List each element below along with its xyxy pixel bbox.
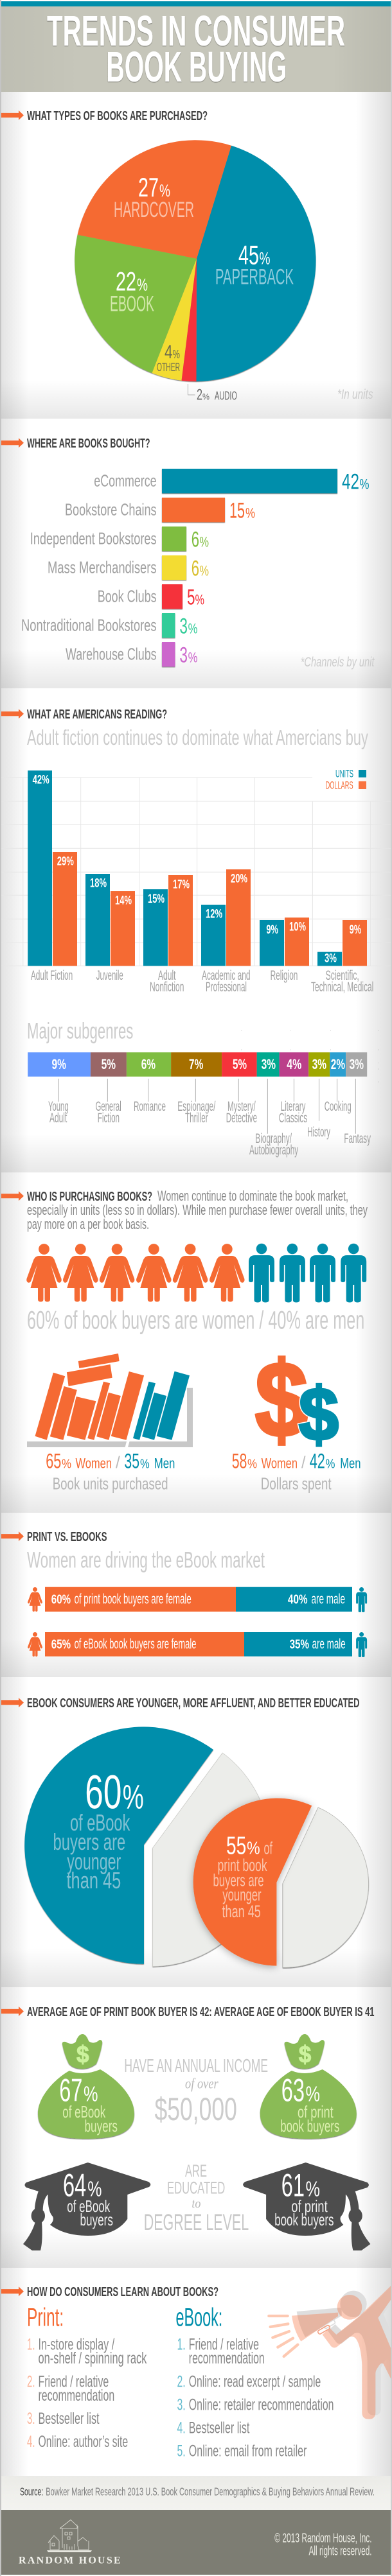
stat: book units purchased: % bbox=[140, 1458, 150, 1472]
education text bbox=[144, 2161, 249, 2235]
stat: book units purchased: Book units purchased bbox=[53, 1474, 168, 1493]
pie: print buyers under 45: print book bbox=[217, 1856, 267, 1875]
list: ebook: eBook: bbox=[176, 2303, 222, 2331]
arrow bbox=[1, 2286, 24, 2296]
subgenre leader lines and labels: Autobiography bbox=[249, 1143, 298, 1158]
pictogram: women and men bbox=[26, 1244, 366, 1302]
subheading: major subgenres: Major subgenres bbox=[27, 1018, 133, 1043]
heading: PRINT VS. EBOOKS bbox=[27, 1530, 107, 1544]
group: academic and professional: 12% bbox=[206, 908, 222, 921]
heading: HOW DO CONSUMERS LEARN ABOUT BOOKS? bbox=[27, 2285, 218, 2299]
bar: nontraditional bookstores: 3 bbox=[179, 614, 188, 639]
source strip bbox=[1, 2476, 391, 2510]
icon: books on shelf bbox=[27, 1353, 193, 1447]
icon: dollar signs: $ bbox=[299, 1372, 339, 1456]
group: adult fiction: 29% bbox=[57, 855, 74, 869]
subgenre leader lines and labels: Adult bbox=[49, 1111, 67, 1126]
arrow bbox=[1, 438, 24, 448]
bar: ecommerce: eCommerce bbox=[94, 471, 157, 491]
bar: warehouse clubs: 3 bbox=[179, 643, 188, 668]
income text: of over bbox=[185, 2076, 219, 2092]
bar: bookstore chains: 15 bbox=[229, 499, 245, 523]
panel: where books are bought bbox=[1, 419, 391, 688]
list: print bbox=[27, 2303, 147, 2451]
header panel bbox=[1, 1, 391, 92]
header background bbox=[1, 6, 391, 92]
arrow bbox=[1, 1531, 24, 1541]
pie: ebook buyers under 45: % bbox=[123, 1779, 144, 1816]
logo: random house bbox=[19, 2519, 121, 2566]
list: ebook: 4. bbox=[177, 2419, 186, 2437]
label: hardcover: % bbox=[159, 181, 170, 200]
split bar: print buyers bbox=[28, 1587, 367, 1612]
pie: ebook buyers under 45: younger bbox=[67, 1849, 121, 1875]
bar: nontraditional bookstores: Nontraditional Bookstores bbox=[21, 616, 157, 635]
label: audio: 2 bbox=[197, 387, 202, 404]
stat: book units purchased bbox=[46, 1450, 175, 1493]
group: juvenile: 18% bbox=[90, 877, 107, 891]
list: ebook bbox=[176, 2303, 334, 2460]
list: print: 1. bbox=[27, 2335, 35, 2353]
group: religion bbox=[260, 918, 309, 983]
chart grid bbox=[1, 778, 391, 966]
income text: $50,000 bbox=[154, 2091, 237, 2127]
list: print: 3. bbox=[27, 2410, 35, 2428]
split bar: print buyers: 40% bbox=[288, 1592, 308, 1606]
subgenre leader lines and labels: Thriller bbox=[185, 1111, 208, 1126]
label: other: 4 bbox=[165, 342, 172, 363]
graduation cap: print buyers: of print bbox=[291, 2197, 328, 2216]
group: adult fiction: Adult Fiction bbox=[31, 968, 73, 983]
icon: dollar signs: $ bbox=[299, 1372, 339, 1456]
arrow bbox=[1, 110, 24, 120]
label: paperback: % bbox=[260, 249, 270, 268]
group: scientific, technical, medical bbox=[311, 920, 373, 995]
group: religion: 9% bbox=[266, 923, 278, 937]
money bag: ebook buyers: of eBook bbox=[62, 2102, 106, 2121]
stat: book units purchased: 65 bbox=[46, 1450, 61, 1473]
subgenre leader lines and labels: Biography/ bbox=[255, 1131, 292, 1146]
money bag: ebook buyers bbox=[38, 2034, 134, 2139]
subgenre leader lines and labels: Mystery/ bbox=[227, 1099, 256, 1114]
money bag: ebook buyers: % bbox=[84, 2082, 98, 2105]
subgenre leader lines and labels: Young bbox=[48, 1099, 69, 1114]
logo: random house: RANDOM HOUSE bbox=[19, 2555, 121, 2566]
stacked bar: subgenres: 2% bbox=[331, 1056, 345, 1072]
label: paperback: 45 bbox=[238, 240, 259, 270]
stacked bar: subgenres: 3% bbox=[350, 1056, 364, 1072]
graduation cap: ebook buyers: buyers bbox=[80, 2210, 113, 2229]
stacked bar: subgenres: 5% bbox=[233, 1056, 247, 1072]
icon: dollar signs: $ bbox=[255, 1341, 308, 1459]
split bar: ebook buyers: 35% bbox=[290, 1638, 309, 1652]
graduation cap: ebook buyers: 64 bbox=[63, 2167, 86, 2203]
subgenre leader lines and labels: Detective bbox=[226, 1111, 257, 1126]
bar: bookstore chains: % bbox=[245, 505, 255, 521]
label: audio: AUDIO bbox=[215, 390, 237, 403]
list: ebook: Friend / relative bbox=[189, 2335, 259, 2353]
slice: audio bbox=[181, 259, 197, 381]
graduation cap: ebook buyers: of eBook bbox=[67, 2197, 111, 2216]
graduation cap: print buyers: % bbox=[306, 2177, 320, 2200]
group: academic and professional: Academic and bbox=[202, 968, 251, 983]
pie: print buyers under 45: than 45 bbox=[222, 1902, 261, 1921]
label: audio: % bbox=[202, 392, 209, 402]
group: scientific, technical, medical: Scientific, bbox=[326, 968, 359, 983]
group: adult fiction: 42% bbox=[33, 774, 49, 787]
subgenre leader lines and labels: General bbox=[96, 1099, 121, 1114]
label: ebook: 22 bbox=[116, 266, 136, 297]
slice: hardcover bbox=[78, 140, 231, 259]
label: paperback: PAPERBACK bbox=[215, 265, 294, 290]
subgenre leader lines and labels: Cooking bbox=[325, 1099, 352, 1114]
stat: dollars spent: Men bbox=[340, 1456, 361, 1472]
money bag: print buyers: book buyers bbox=[280, 2116, 339, 2136]
list: print: Bestseller list bbox=[39, 2410, 100, 2428]
bar: warehouse clubs: Warehouse Clubs bbox=[66, 645, 157, 664]
money bag: ebook buyers: buyers bbox=[85, 2116, 118, 2136]
list: print: In-store display / bbox=[39, 2335, 114, 2353]
group: scientific, technical, medical: 9% bbox=[350, 923, 361, 937]
money bag: ebook buyers: 67 bbox=[59, 2072, 82, 2108]
bar: bookstore chains bbox=[65, 498, 255, 523]
heading with intro text bbox=[27, 1188, 368, 1232]
pie: print buyers under 45: of bbox=[263, 1838, 272, 1858]
group: adult nonfiction: 15% bbox=[148, 892, 165, 906]
stacked bar: subgenres bbox=[28, 1052, 367, 1077]
panel: how consumers learn about books bbox=[1, 2268, 392, 2476]
stat: book units purchased: % bbox=[62, 1458, 71, 1472]
stacked bar: subgenres: 3% bbox=[262, 1056, 276, 1072]
note: in units: *In units bbox=[337, 387, 373, 402]
split bar: ebook buyers bbox=[28, 1632, 367, 1657]
group: juvenile: Juvenile bbox=[96, 968, 123, 983]
bar: book clubs: 5 bbox=[187, 586, 195, 610]
split bar: print buyers: are male bbox=[311, 1590, 345, 1606]
group: academic and professional bbox=[201, 869, 251, 995]
money bag: ebook buyers: $ bbox=[76, 2041, 89, 2067]
stat: dollars spent: % bbox=[326, 1458, 335, 1472]
graduation cap: print buyers: 61 bbox=[281, 2167, 305, 2203]
group: academic and professional: 20% bbox=[231, 873, 247, 886]
group: adult nonfiction: 17% bbox=[173, 878, 190, 892]
bar: mass merchandisers: % bbox=[199, 563, 209, 579]
panel: ebook consumers bbox=[1, 1677, 391, 1987]
footer bbox=[1, 2510, 391, 2575]
group: academic and professional: Professional bbox=[206, 980, 247, 995]
group: adult nonfiction: Adult bbox=[158, 968, 176, 983]
bar: mass merchandisers: Mass Merchandisers bbox=[48, 558, 157, 577]
list: ebook: 3. bbox=[177, 2396, 186, 2414]
column chart bbox=[1, 768, 391, 995]
subgenre leader lines and labels: History bbox=[307, 1125, 330, 1140]
label: ebook: % bbox=[137, 275, 148, 295]
label: ebook bbox=[110, 266, 154, 317]
source text: Source: bbox=[20, 2485, 43, 2498]
group: religion: 10% bbox=[289, 920, 306, 934]
heading: WHAT ARE AMERICANS READING? bbox=[27, 708, 167, 722]
bar: warehouse clubs: % bbox=[188, 650, 197, 666]
stat: book units purchased: Men bbox=[154, 1456, 175, 1472]
graduation cap: print buyers bbox=[243, 2163, 370, 2250]
list: print: Friend / relative bbox=[39, 2372, 109, 2390]
copyright bbox=[274, 2531, 372, 2558]
arrow bbox=[1, 1191, 24, 1201]
subgenre leader lines and labels: Literary bbox=[281, 1099, 306, 1114]
label: hardcover bbox=[114, 172, 194, 222]
bar: ecommerce: 42 bbox=[342, 470, 359, 494]
stat: dollars spent: 58 bbox=[232, 1450, 247, 1473]
page edge left bbox=[0, 0, 1, 2576]
bar: book clubs: Book Clubs bbox=[98, 586, 157, 605]
illustration: person with megaphone bbox=[269, 2282, 392, 2419]
money bag: print buyers: 63 bbox=[281, 2072, 305, 2108]
bar: independent bookstores: 6 bbox=[192, 528, 199, 552]
arrow bbox=[1, 1698, 24, 1707]
subgenre leader lines and labels: Romance bbox=[134, 1099, 166, 1114]
panel: print vs ebooks bbox=[1, 1513, 391, 1677]
money bag: print buyers bbox=[260, 2034, 357, 2139]
stat: dollars spent: / bbox=[301, 1453, 306, 1472]
panel: who is purchasing books bbox=[1, 1172, 391, 1513]
bar: mass merchandisers: 6 bbox=[192, 557, 199, 581]
bar: independent bookstores: % bbox=[199, 534, 209, 550]
graduation cap: print buyers: book buyers bbox=[274, 2210, 334, 2229]
bar: book clubs: % bbox=[195, 592, 204, 608]
education text: ARE bbox=[185, 2161, 207, 2180]
money bag: print buyers: $ bbox=[299, 2041, 312, 2067]
pie: print buyers under 45: younger bbox=[222, 1885, 262, 1904]
pie: print buyers under 45: 55 bbox=[226, 1832, 246, 1859]
subgenre leader lines and labels bbox=[48, 1079, 371, 1158]
pie: ebook buyers under 45 bbox=[24, 1727, 270, 1967]
subgenre leader lines and labels: Espionage/ bbox=[177, 1099, 215, 1114]
list: print: Print: bbox=[27, 2303, 64, 2331]
subgenre leader lines and labels: Classics bbox=[279, 1111, 307, 1126]
panel: average age, income, education bbox=[1, 1987, 391, 2268]
legend bbox=[326, 768, 366, 791]
label: audio bbox=[188, 384, 237, 404]
list: ebook: 2. bbox=[177, 2372, 186, 2390]
stat: book units purchased: 35 bbox=[124, 1450, 139, 1473]
list: ebook: recommendation bbox=[189, 2349, 265, 2367]
split bar: ebook buyers: 65% bbox=[51, 1638, 71, 1652]
pie: ebook buyers under 45: than 45 bbox=[67, 1867, 121, 1893]
money bag: print buyers: % bbox=[306, 2082, 320, 2105]
pie: ebook buyers under 45: 60 bbox=[85, 1766, 122, 1819]
bar: nontraditional bookstores: % bbox=[188, 621, 197, 637]
list: print: on-shelf / spinning rack bbox=[39, 2349, 147, 2367]
split bar: print buyers: of print book buyers are female bbox=[75, 1590, 192, 1606]
subheading: Women are driving the eBook market bbox=[27, 1548, 265, 1573]
bar: ecommerce: % bbox=[360, 476, 369, 492]
split bar: ebook buyers: of eBook book buyers are female bbox=[75, 1636, 196, 1652]
list: print: Online: author’s site bbox=[39, 2433, 128, 2451]
bar: book clubs bbox=[98, 584, 204, 610]
stat: book units purchased: / bbox=[116, 1453, 121, 1472]
stacked bar: subgenres: 5% bbox=[102, 1056, 116, 1072]
slice: paperback bbox=[197, 146, 316, 381]
title bbox=[47, 7, 345, 91]
pie: print buyers under 45: % bbox=[247, 1838, 260, 1858]
split bar: print buyers: 60% bbox=[51, 1592, 71, 1606]
arrow bbox=[1, 2006, 24, 2016]
legend: UNITS bbox=[335, 768, 353, 780]
label: other: OTHER bbox=[157, 361, 180, 374]
bar: independent bookstores: Independent Bookstores bbox=[30, 529, 157, 548]
subgenre leader lines and labels: Fantasy bbox=[344, 1131, 371, 1146]
list: ebook: 1. bbox=[177, 2335, 186, 2353]
pie chart bbox=[75, 140, 316, 381]
stat: dollars spent: 42 bbox=[310, 1450, 325, 1473]
income text bbox=[124, 2056, 268, 2127]
page edge right bbox=[391, 0, 392, 2576]
stat: dollars spent: Women bbox=[262, 1456, 298, 1472]
label: other bbox=[157, 342, 180, 374]
teal top band bbox=[1, 1, 391, 6]
list: ebook: Online: email from retailer bbox=[189, 2442, 307, 2460]
stat: dollars spent: % bbox=[247, 1458, 257, 1472]
group: adult nonfiction: Nonfiction bbox=[150, 980, 184, 995]
list: print: 2. bbox=[27, 2372, 35, 2390]
group: adult fiction bbox=[28, 770, 77, 983]
label: paperback bbox=[215, 240, 294, 290]
graduation cap: ebook buyers: % bbox=[87, 2177, 102, 2200]
list: print: recommendation bbox=[39, 2387, 114, 2405]
label: hardcover: 27 bbox=[138, 172, 159, 202]
stacked bar: subgenres: 6% bbox=[141, 1056, 156, 1072]
heading with intro text: pay more on a per book basis. bbox=[27, 1216, 149, 1232]
list: print: 4. bbox=[27, 2433, 35, 2451]
panel: what americans are reading bbox=[1, 688, 391, 1172]
list: ebook: 5. bbox=[177, 2442, 186, 2460]
stacked bar: subgenres: 4% bbox=[287, 1056, 301, 1072]
income text: HAVE AN ANNUAL INCOME bbox=[124, 2056, 268, 2076]
stat: dollars spent: Dollars spent bbox=[261, 1474, 332, 1493]
label: other: % bbox=[172, 348, 180, 361]
bar: ecommerce bbox=[94, 469, 370, 494]
label: ebook: EBOOK bbox=[110, 292, 154, 317]
pie: print buyers under 45: buyers are bbox=[213, 1871, 263, 1890]
legend: DOLLARS bbox=[326, 779, 353, 791]
heading with intro text: WHO IS PURCHASING BOOKS? bbox=[27, 1190, 152, 1204]
pie: ebook buyers under 45: of eBook bbox=[70, 1809, 130, 1836]
stacked bar: subgenres: 9% bbox=[51, 1056, 66, 1072]
stat: dollars spent bbox=[232, 1450, 361, 1493]
stat: book units purchased: Women bbox=[76, 1456, 112, 1472]
graduation cap: ebook buyers bbox=[23, 2163, 150, 2250]
money bag: print buyers: of print bbox=[298, 2102, 334, 2121]
group: adult nonfiction bbox=[143, 875, 193, 995]
slice: other bbox=[152, 259, 197, 381]
panel: types of books bbox=[1, 92, 391, 419]
stacked bar: subgenres: 3% bbox=[312, 1056, 326, 1072]
education text: EDUCATED bbox=[167, 2178, 225, 2197]
slice: ebook bbox=[75, 235, 197, 373]
heading: WHAT TYPES OF BOOKS ARE PURCHASED? bbox=[27, 109, 208, 123]
pie: print buyers under 45 bbox=[193, 1798, 368, 1967]
arrow bbox=[1, 709, 24, 718]
heading: WHERE ARE BOOKS BOUGHT? bbox=[27, 437, 150, 451]
education text: DEGREE LEVEL bbox=[144, 2210, 249, 2235]
subgenre leader lines and labels: Fiction bbox=[98, 1111, 120, 1126]
list: ebook: Bestseller list bbox=[189, 2419, 249, 2437]
bar: bookstore chains: Bookstore Chains bbox=[65, 500, 157, 519]
bar chart: channels bbox=[21, 469, 369, 668]
group: scientific, technical, medical: 3% bbox=[325, 952, 337, 965]
pie: ebook buyers under 45: buyers are bbox=[53, 1829, 125, 1855]
education text: to bbox=[192, 2196, 200, 2211]
group: juvenile bbox=[85, 874, 135, 983]
stacked bar: subgenres: 7% bbox=[189, 1056, 203, 1072]
label: hardcover: HARDCOVER bbox=[114, 198, 194, 222]
split bar: ebook buyers: are male bbox=[312, 1636, 346, 1652]
group: juvenile: 14% bbox=[115, 894, 132, 908]
group: religion: Religion bbox=[271, 968, 298, 983]
